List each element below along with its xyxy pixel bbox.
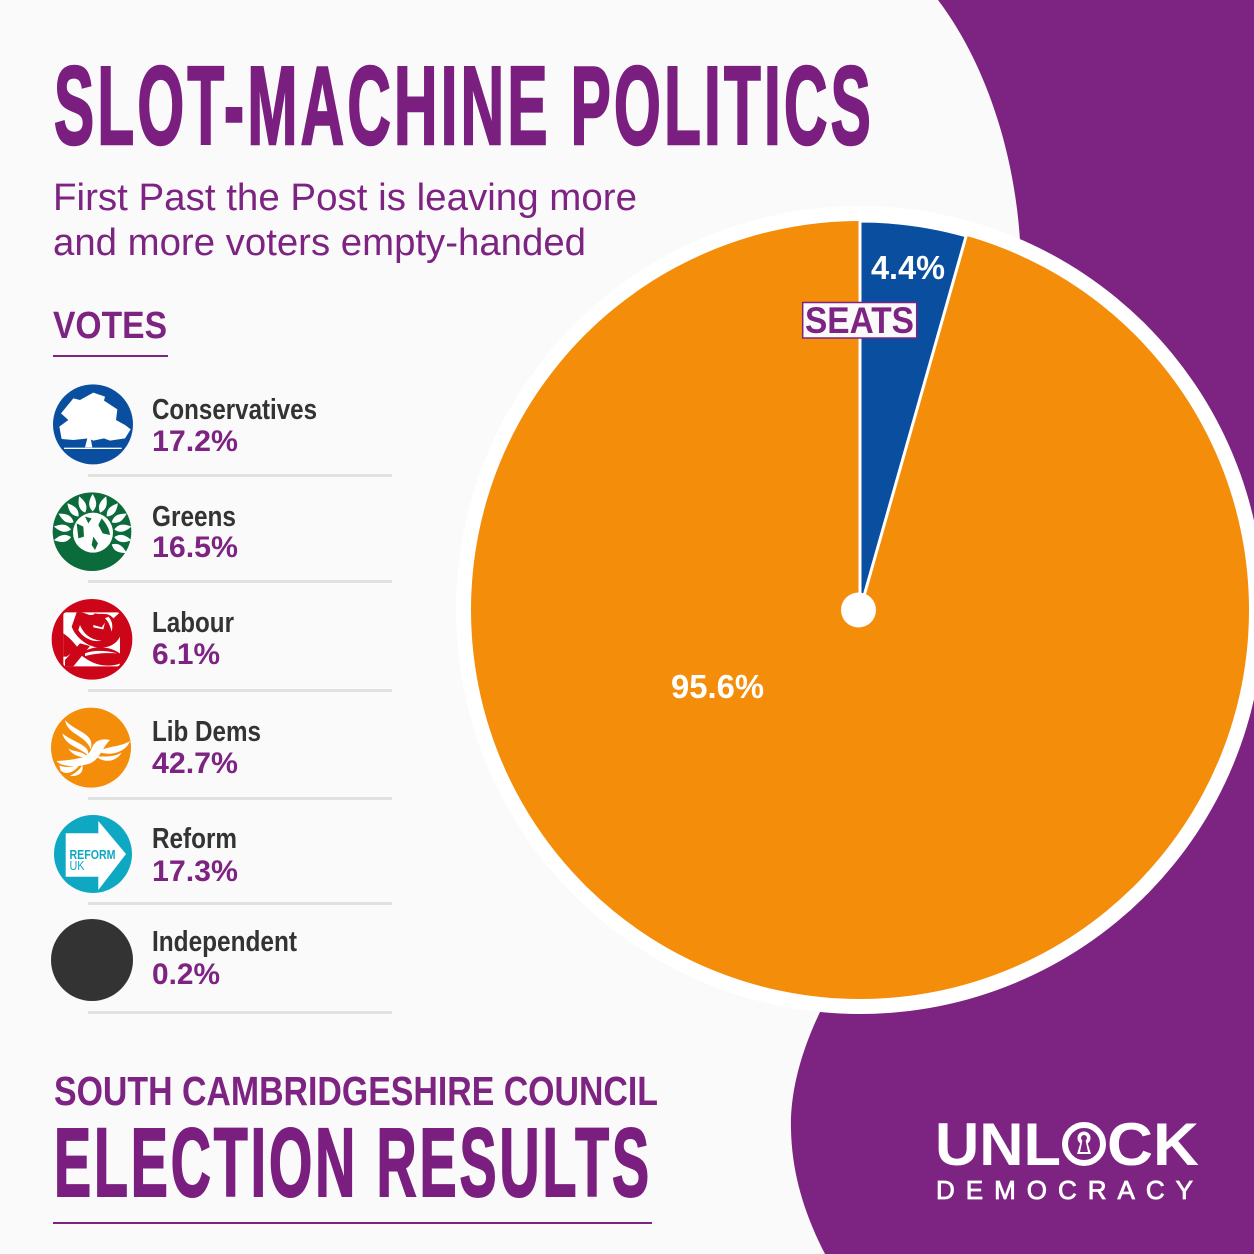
subtitle [53,177,637,264]
logo: Unlock Democracy [935,1111,1199,1205]
slice: Lib Dems 95.6% [471,221,1249,999]
footer heading: SOUTH CAMBRIDGESHIRE COUNCIL [54,1068,658,1114]
subtitle: First Past the Post is leaving more [53,177,637,219]
value: Independent: 0.2% [152,958,220,991]
value: 4.4%: 4.4% [871,249,945,286]
value: Lib Dems: 42.7% [152,747,238,780]
row: Reform [54,815,238,893]
logo: Unlock Democracy: DEMOCRACY [936,1175,1193,1205]
footer heading: ELECTION RESULTS [54,1108,652,1217]
label: Reform: Reform [152,823,237,855]
icon: Reform arrow: UK [70,858,85,873]
row: Conservatives [53,384,317,464]
votes heading: VOTES [53,305,167,347]
label: Lib Dems: Lib Dems [152,716,261,748]
label: Labour: Labour [152,607,234,639]
icon: Lib Dems bird [51,708,131,788]
value: 95.6%: 95.6% [671,668,764,705]
icon: Greens globe [53,492,132,571]
value: Reform: 17.3% [152,855,238,888]
row: Labour [52,599,234,680]
seats label: SEATS [805,300,914,341]
value: Greens: 16.5% [152,531,238,564]
row: Lib Dems [51,708,261,788]
pie chart: seats [456,206,1254,1014]
value: Labour: 6.1% [152,638,220,671]
logo: Unlock Democracy: CK [1107,1111,1199,1178]
label: Conservatives: Conservatives [152,394,317,426]
label: Independent: Independent [152,926,297,958]
logo: Unlock Democracy: UNL [935,1111,1061,1178]
icon: keyhole O [1065,1125,1103,1163]
value: Conservatives: 17.2% [152,425,238,458]
row: Greens [53,492,238,571]
footer heading [53,1068,658,1224]
label: Greens: Greens [152,501,236,533]
icon: Conservative tree [53,384,133,464]
pie centre dot [841,592,876,628]
votes list [51,384,317,1001]
icon: Reform arrow: REFORM [70,847,116,862]
slice: Conservatives 4.4% [860,221,966,610]
purple background shape [791,0,1254,1254]
icon: Labour rose [52,599,132,680]
icon: Reform arrow [54,815,132,893]
icon: Independent dot [51,919,133,1001]
row: Independent [51,919,297,1001]
subtitle: and more voters empty-handed [53,222,586,264]
